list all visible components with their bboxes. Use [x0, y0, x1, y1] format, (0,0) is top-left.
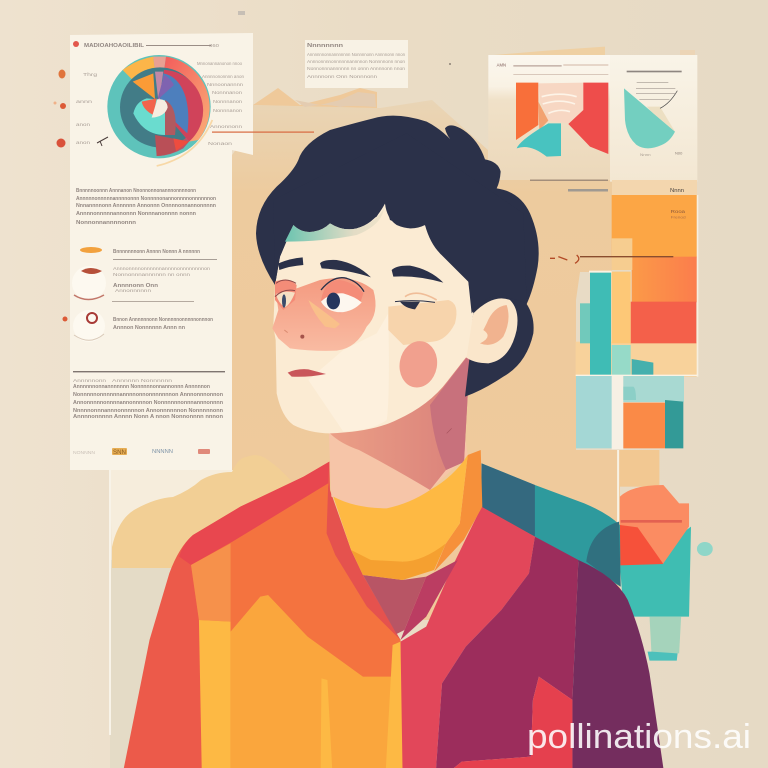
teal dot	[697, 542, 713, 556]
teal base	[648, 652, 678, 661]
teal block	[620, 527, 691, 617]
hair front fringe	[273, 133, 527, 313]
figure: neck shadow	[330, 353, 470, 490]
item one: Annonnnnnn	[115, 288, 152, 293]
back shoulder dark	[482, 463, 535, 537]
V neck inset	[363, 575, 426, 634]
paper	[488, 55, 610, 180]
chart: hourglass	[516, 83, 608, 157]
panel: top centre note: Nnnnnnnn	[307, 43, 343, 49]
eye centre	[321, 278, 364, 313]
orange pill	[80, 247, 102, 253]
pie labels right: Mnnonannanonon nnoo	[197, 61, 242, 66]
chart: teal funnel	[624, 71, 682, 148]
footer tags: NNNNN	[152, 449, 173, 455]
collar amber fold	[351, 543, 446, 580]
item one: Nonnonnnannnnnn nn onnn	[113, 272, 191, 277]
pie labels right: Annonnonn	[210, 124, 243, 129]
right half paper	[610, 55, 697, 182]
intro paragraph: Annnnnonnnnnannnnonnn Nonnnnonannonnnnonnnnnnon	[76, 196, 216, 202]
panel: top centre note	[305, 40, 408, 88]
pie labels left: anon	[76, 122, 91, 127]
nose marks	[300, 335, 304, 339]
eye left	[275, 280, 297, 310]
intro paragraph: Nnnannnnonn Annnnnn Annonnn Onnnnonnannonnnnn	[76, 203, 216, 209]
back shoulder teal	[482, 463, 621, 587]
item text two: Bnnon Annnnnnonn Nonnnnnonnnnnonnnon	[113, 317, 213, 323]
left yellow panel	[199, 620, 231, 768]
lower paragraph	[73, 371, 225, 420]
panel: top centre note: Annnonnnnonnnnnnannnnon Nonnnnonn nnon	[307, 59, 406, 64]
orange chest	[191, 483, 401, 678]
intro paragraph: Nonnonnannnnonnn	[76, 220, 136, 226]
pie labels right: Nonnnanon	[212, 90, 243, 95]
panel: pale fade under left sheet	[110, 470, 240, 568]
block caption: Rooa	[671, 209, 685, 215]
brow left	[278, 257, 303, 270]
plum right chest	[436, 537, 578, 768]
panel: mountain chart above head	[253, 88, 377, 108]
blush	[396, 338, 441, 391]
pie labels right: Nonnnanon	[213, 108, 243, 113]
placket	[386, 642, 403, 768]
pie title: 360	[209, 43, 220, 48]
white guide	[617, 450, 619, 567]
leader line with arrow marks	[550, 255, 673, 263]
item two: Annnon Nonnnnnn Annn nn	[113, 325, 185, 331]
mouth	[288, 369, 326, 377]
lower paragraph: Annnnonnnnn Annnn Nonn A nnon Nonnonnnn nnnon	[73, 414, 223, 420]
pale green block	[650, 617, 681, 653]
right tab	[680, 50, 695, 55]
intro paragraph: Bnnnnnoonnn Annnanon Nnonnonnonannnonnnnonn	[76, 188, 196, 194]
panel: top right sheet	[488, 47, 697, 182]
lower face facet	[308, 313, 389, 432]
footer tags: SNN	[113, 450, 126, 456]
side bullet markers left	[54, 70, 68, 322]
pie labels right: Nnnoonannnn	[207, 82, 244, 87]
pie labels right: Nonaon	[208, 141, 233, 146]
lower paragraph: Annonnnnnonnnnannonnnnon Nonnnnnnonnnannnonnnn	[73, 400, 223, 406]
figure: shirt and collar	[124, 427, 663, 768]
peach block	[620, 450, 659, 487]
chart: right colour block treemap: Frenod	[671, 215, 686, 220]
chart: right colour block treemap	[576, 195, 698, 377]
red shoulder band	[179, 462, 329, 565]
chart: lower colour squares	[576, 376, 684, 449]
lighter orange panel	[191, 543, 231, 622]
rules below top right sheet: Nnnn	[670, 188, 684, 194]
pie labels right: Nonnnanon	[213, 99, 243, 104]
small captions: N00	[675, 150, 683, 155]
eye closed	[395, 293, 437, 309]
hair	[256, 116, 539, 397]
forehead tint	[285, 208, 384, 242]
intro paragraph	[76, 188, 216, 226]
pie title	[73, 41, 220, 49]
pie labels left: anon	[76, 140, 91, 145]
dark purple sleeve	[572, 560, 663, 768]
pie labels left: annn	[76, 99, 93, 104]
sheet paper	[70, 33, 253, 470]
face	[273, 203, 473, 433]
icon: round badge two	[73, 310, 105, 342]
lower paragraph: Annnnnn Nonnnnnn	[112, 378, 173, 383]
lower left muted band	[110, 560, 200, 768]
item text: Bnnnnnnnonn Annnn Nonnn A nnnnnn	[113, 249, 200, 255]
pie labels left: Thrg	[83, 72, 98, 77]
small marks top	[238, 11, 451, 65]
brow centre	[320, 260, 371, 277]
vertical white guide line	[109, 470, 111, 735]
outer red body	[124, 462, 402, 768]
panel: top right sheet: Nnnn	[640, 153, 651, 157]
cheek shade	[388, 300, 456, 345]
footer tags	[73, 448, 210, 456]
panel: peach blob lower left	[112, 455, 300, 568]
sheet heading: AMN	[497, 63, 506, 68]
item one	[72, 247, 217, 302]
panel: top centre note: Nonnonnnannnnnn nn onnn Annnnonn nnon	[307, 66, 406, 71]
lower paragraph: Annnnnnonnannnnnnn Nonnnnnonnannonnn Annnnnon	[73, 384, 210, 390]
panel: top centre note: Annnnonn Onn Nonnnonn	[307, 74, 378, 79]
collar yellow	[333, 455, 468, 562]
watermark: pollinations.ai	[527, 718, 751, 756]
footer tags: NONNNN	[73, 450, 95, 455]
intro paragraph: Annnnonnnnnannonnn Nonnnanonnnn nonnn	[76, 211, 196, 217]
lower paragraph: Nonnnnnonnnnnnannnnonnonnnnnnnon Annnonnnonnon	[73, 392, 223, 398]
chart: donut pie	[107, 55, 212, 166]
pie labels left	[76, 72, 108, 146]
red wedge	[620, 525, 663, 565]
lower paragraph: Nnnnnonnnannnonnnnnon Annonnnnnnon Nonnnnnonn	[73, 408, 223, 414]
collar orange side	[434, 450, 482, 572]
item one: Annnnonn Onn	[113, 283, 158, 289]
brow right	[392, 266, 443, 283]
panel: lower right stacked shapes	[617, 450, 713, 661]
rules below top right sheet	[530, 180, 697, 195]
item two	[73, 310, 213, 342]
amber chest	[231, 595, 393, 768]
nose and eye skin	[272, 278, 376, 351]
pie labels right	[197, 61, 244, 146]
tab	[490, 47, 605, 55]
icon: round badge	[72, 266, 106, 300]
coral shape	[620, 485, 689, 565]
inner red V	[327, 485, 401, 640]
panel: left report sheet	[70, 33, 253, 470]
item one: Annnonnnnonnnnnnannnnonnnnnnnnon	[113, 266, 211, 271]
panel: top centre note: Annnnnnonnannnnnnn Nonnnnonn Annnnonn nnon	[307, 52, 405, 57]
lower paragraph: Annnnnonn	[73, 378, 107, 383]
ear	[465, 298, 517, 363]
red pocket	[454, 677, 572, 768]
figure: collar	[333, 450, 482, 580]
orange leader line	[212, 132, 314, 133]
pie labels right: Annnnononnnn anon	[202, 74, 244, 79]
red right chest	[401, 507, 535, 768]
figure: head	[256, 116, 539, 433]
neck	[329, 427, 468, 508]
pie title: MADIOAHOAOILIBIL	[84, 43, 144, 49]
central peach backdrop	[232, 100, 620, 620]
